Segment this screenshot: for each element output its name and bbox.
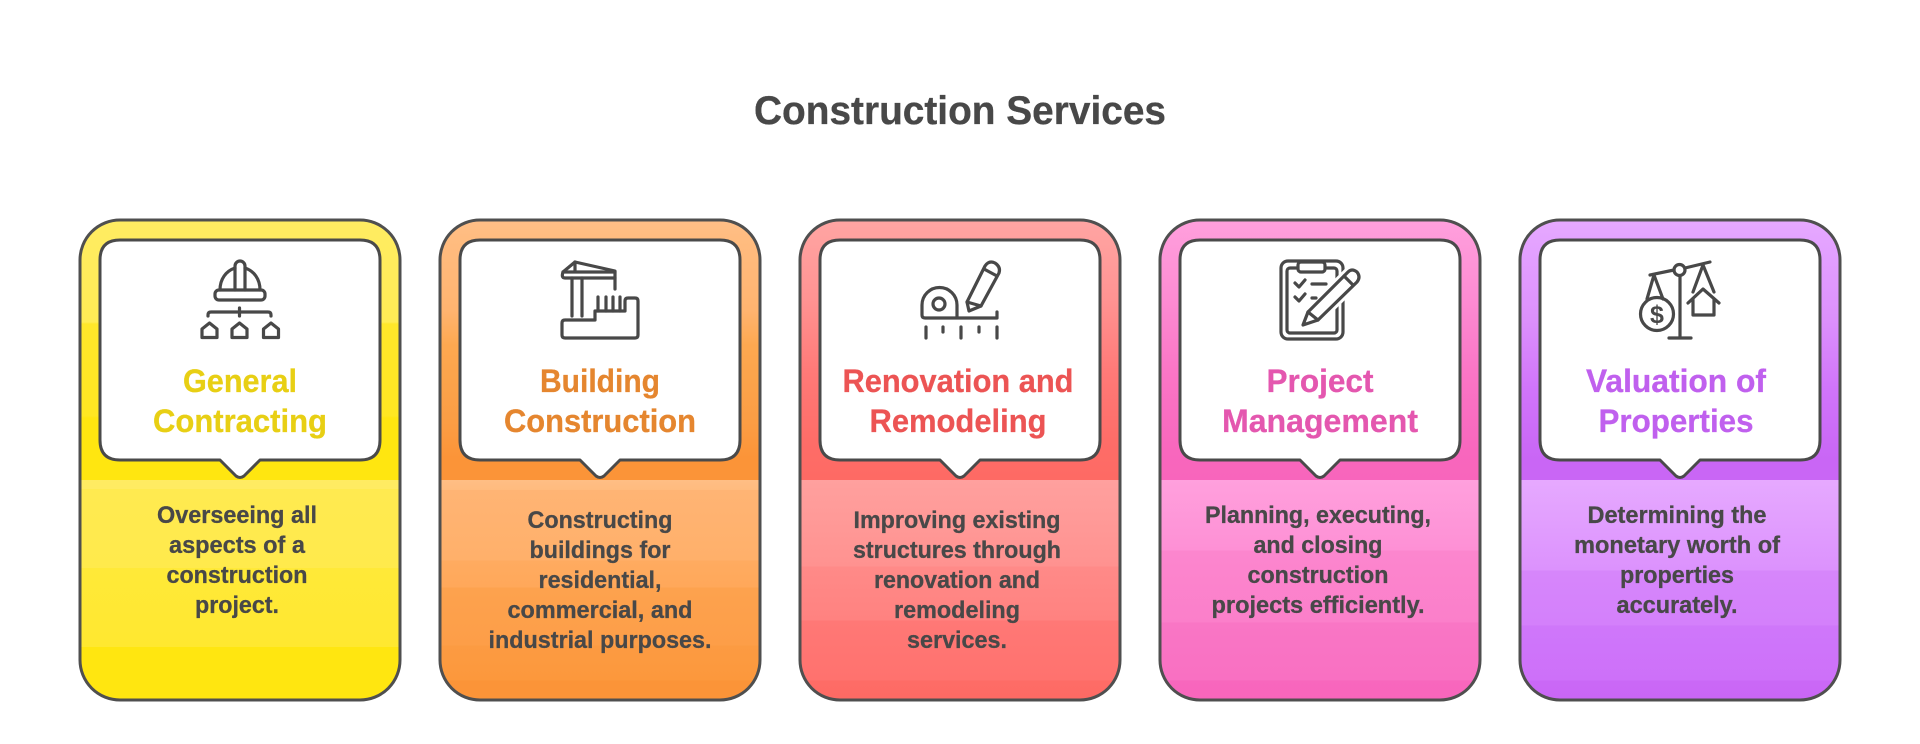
description: renovation and <box>874 567 1040 594</box>
heading <box>1222 363 1418 439</box>
description: Constructing <box>528 507 672 534</box>
speech bubble <box>820 240 1100 478</box>
speech bubble <box>460 240 740 478</box>
heading: Building <box>540 363 660 399</box>
heading: Properties <box>1598 403 1754 439</box>
description: monetary worth of <box>1574 532 1781 559</box>
card background <box>440 220 760 700</box>
heading <box>1586 363 1766 439</box>
heading: General <box>183 363 297 399</box>
heading: Valuation of <box>1586 363 1766 399</box>
card background <box>1520 220 1840 700</box>
icon: crane and building <box>562 262 638 338</box>
description: construction <box>1248 562 1388 589</box>
description: commercial, and <box>508 597 692 624</box>
description: Planning, executing, <box>1205 502 1431 529</box>
description: structures through <box>853 537 1061 564</box>
panel: Project Management <box>1160 220 1480 700</box>
heading: Management <box>1222 403 1418 439</box>
panel: Building Construction <box>440 220 760 700</box>
speech bubble <box>1540 240 1820 478</box>
icon: tape measure and pencil <box>922 262 1000 338</box>
description: and closing <box>1254 532 1382 559</box>
icon: clipboard and pencil <box>1281 261 1359 339</box>
description: aspects of a <box>169 532 306 559</box>
heading: Construction <box>504 403 696 439</box>
description: residential, <box>538 567 662 594</box>
description <box>853 507 1061 654</box>
icon: scale with coin and house <box>1640 262 1719 338</box>
description: Overseeing all <box>157 502 317 529</box>
icon label: dollar sign: $ <box>1650 301 1664 329</box>
panel: General Contracting <box>80 220 400 700</box>
description: services. <box>907 627 1007 654</box>
description: Determining the <box>1588 502 1766 529</box>
description: construction <box>166 562 308 589</box>
description: accurately. <box>1616 592 1738 619</box>
heading: Contracting <box>153 403 327 439</box>
description <box>157 502 317 619</box>
heading <box>842 363 1074 439</box>
card background <box>800 220 1120 700</box>
description: industrial purposes. <box>488 627 712 654</box>
speech bubble <box>100 240 380 478</box>
title: Construction Services <box>754 89 1166 133</box>
description: project. <box>195 592 279 619</box>
description <box>1205 502 1431 619</box>
description: buildings for <box>530 537 670 564</box>
description <box>1574 502 1781 619</box>
heading: Project <box>1266 363 1374 399</box>
description: Improving existing <box>854 507 1060 534</box>
heading <box>153 363 327 439</box>
panel: Valuation of Properties <box>1520 220 1840 700</box>
panel: Renovation and Remodeling <box>800 220 1120 700</box>
heading: Renovation and <box>842 363 1074 399</box>
description: remodeling <box>894 597 1020 624</box>
card background <box>1160 220 1480 700</box>
heading: Remodeling <box>870 403 1046 439</box>
description: projects efficiently. <box>1212 592 1424 619</box>
description <box>488 507 712 654</box>
speech bubble <box>1180 240 1460 478</box>
card background <box>80 220 400 700</box>
heading <box>504 363 696 439</box>
description: properties <box>1620 562 1734 589</box>
icon: hard hat with org chart <box>202 261 278 338</box>
